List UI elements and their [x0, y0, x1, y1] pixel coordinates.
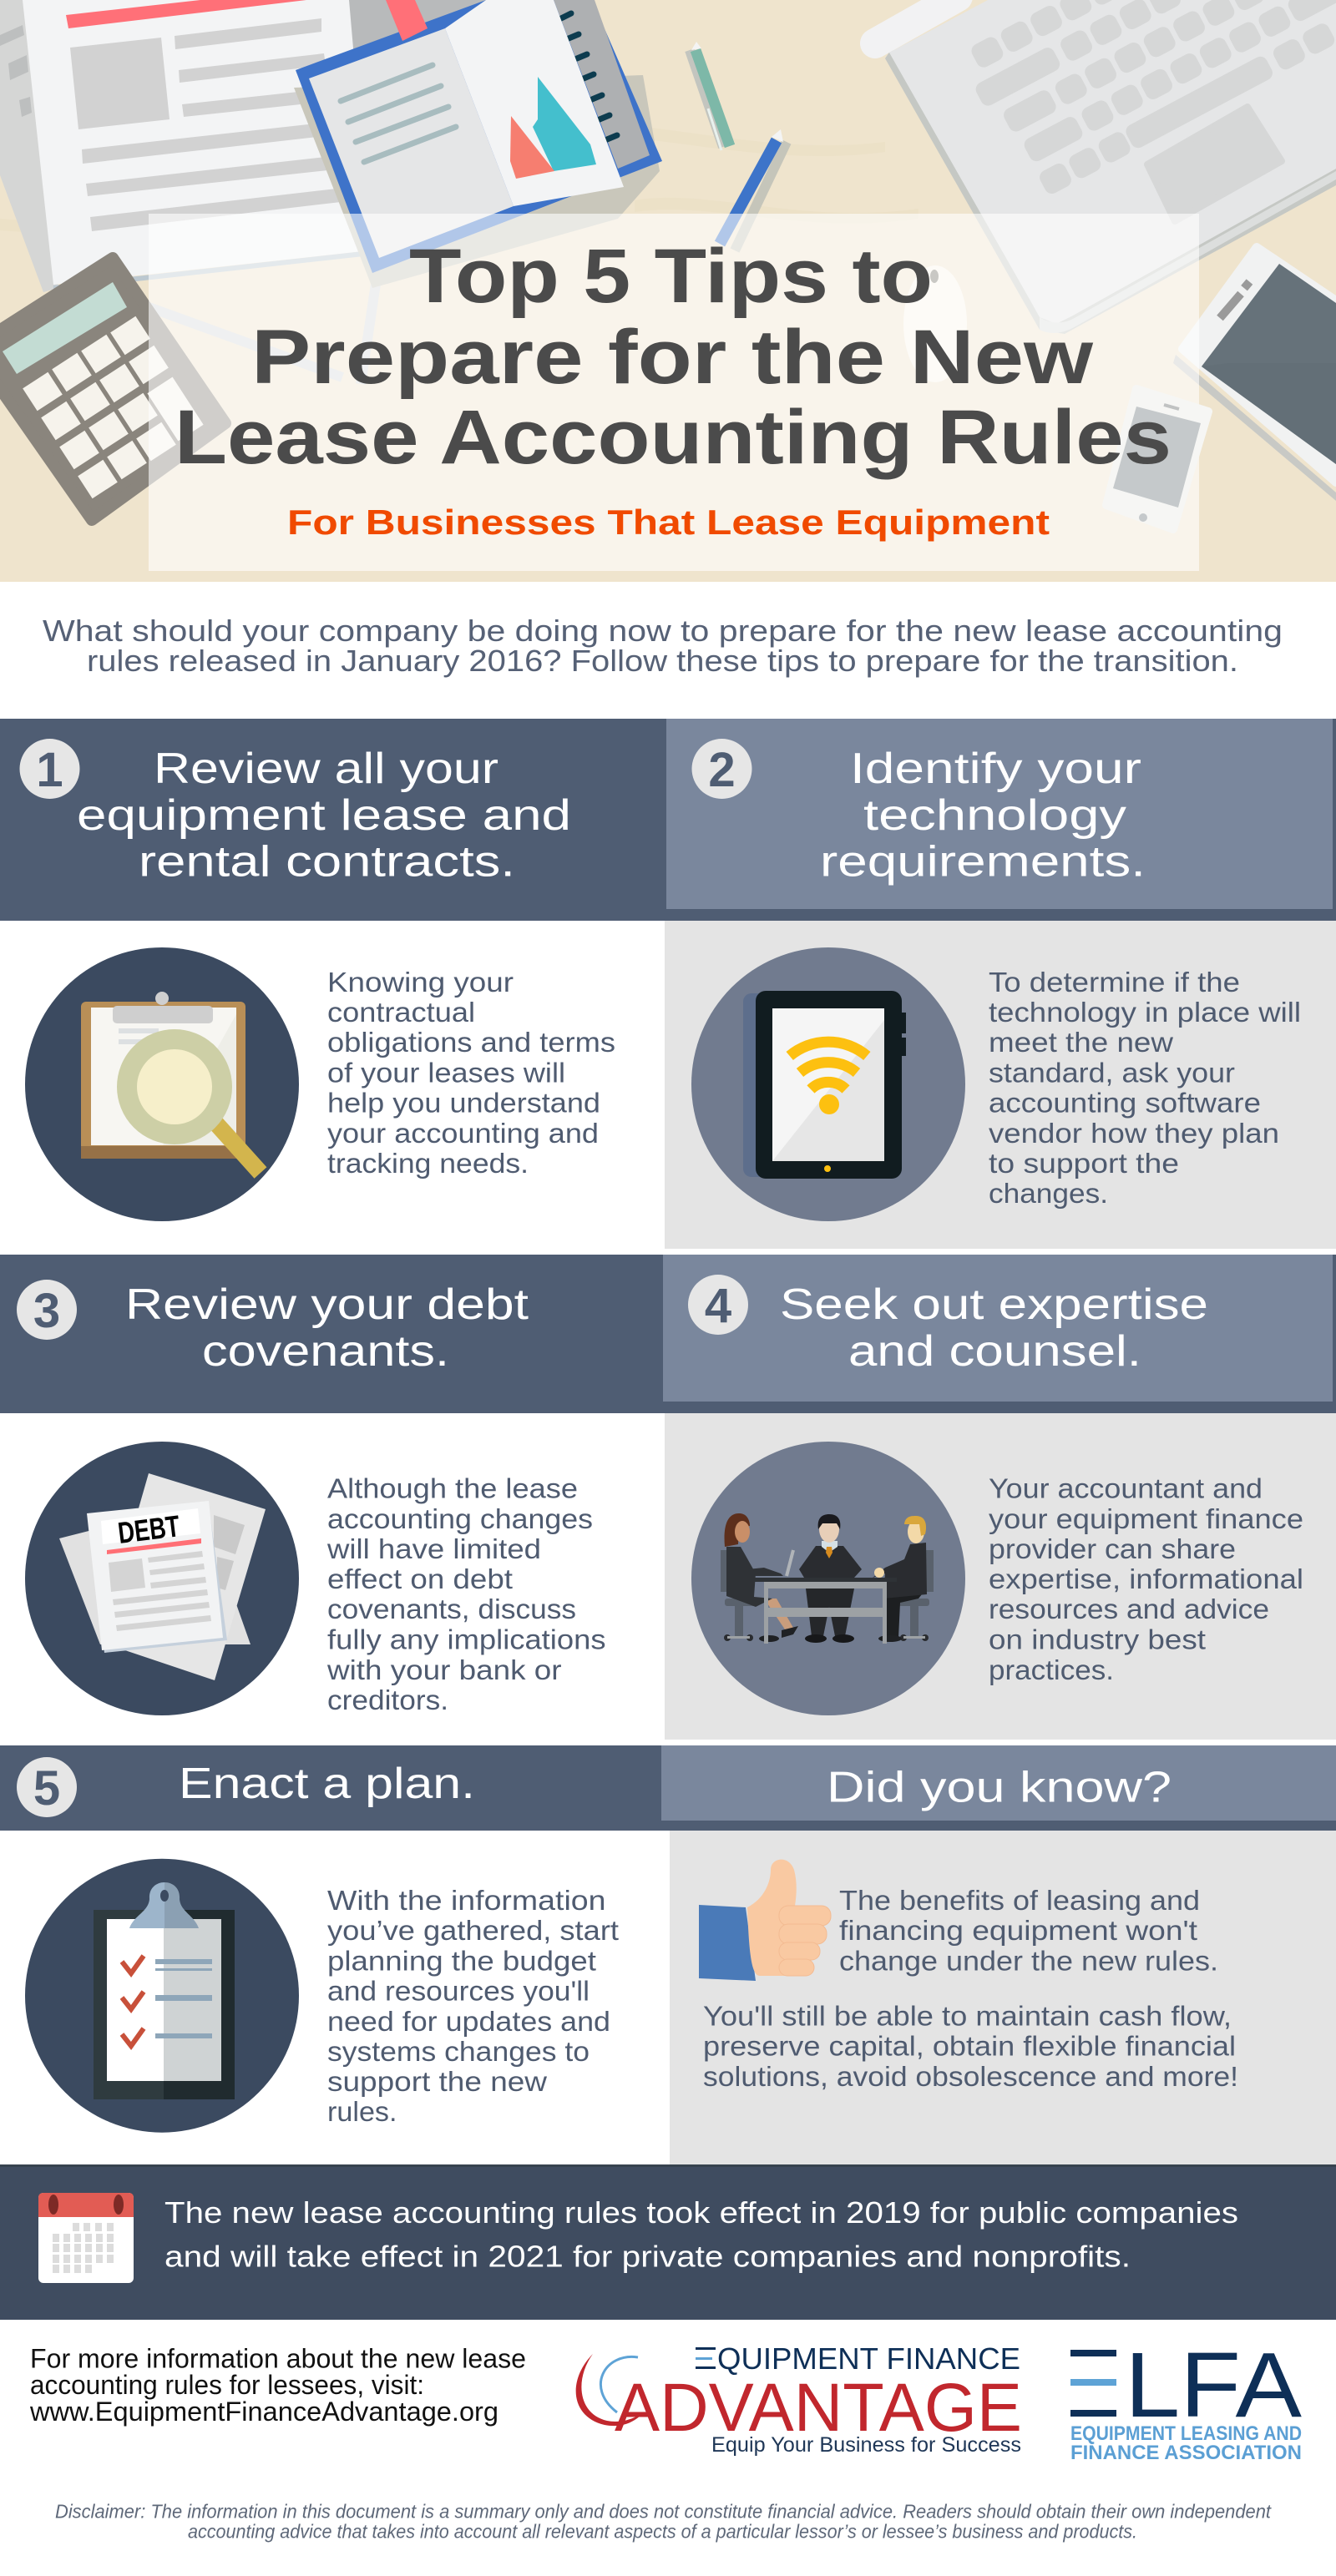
panel: tip 4 body: your equipment finance — [989, 1503, 1303, 1534]
panel: tip 5 header — [0, 1745, 661, 1831]
panel: tip 3 body: covenants, discuss — [327, 1594, 576, 1624]
title — [175, 234, 1172, 480]
intro text: What should your company be doing now to prepare for the new lease accounting — [43, 614, 1283, 648]
text: more information link — [29, 2344, 526, 2427]
title: Lease Accounting Rules — [175, 395, 1172, 480]
icon: pens — [690, 42, 787, 250]
icon: clipboard with magnifying glass — [25, 947, 299, 1221]
panel: tip 5 body: support the new — [327, 2066, 547, 2097]
panel: did you know header: Did you know? — [827, 1764, 1172, 1812]
panel: tip 1 header: 1 — [36, 743, 63, 797]
text: more information link: For more information about the new lease — [30, 2344, 526, 2374]
panel: tip 4 header: and counsel. — [848, 1327, 1141, 1376]
panel: tip 2 body — [665, 921, 1336, 1249]
panel: tip 1 header: Review all your — [154, 745, 498, 793]
panel: tip 3 body — [25, 1442, 606, 1715]
logo: Equipment Finance Advantage: ADVANTAGE — [615, 2370, 1022, 2446]
panel: did you know header — [661, 1745, 1336, 1831]
panel: tip 3 header — [0, 1255, 663, 1413]
icon: checklist clipboard — [25, 1859, 299, 2133]
panel: tip 3 body: will have limited — [326, 1533, 541, 1564]
panel: tip 3 header: 3 — [33, 1284, 60, 1338]
panel: tip 5 body: need for updates and — [327, 2006, 610, 2037]
icon: faint lamp shadows — [142, 284, 376, 384]
icon: stacked papers — [0, 0, 501, 292]
panel: tip 1 header: equipment lease and — [77, 791, 571, 840]
panel: tip 2 header: 2 — [708, 743, 736, 797]
icon: tablet with wifi — [691, 947, 965, 1221]
panel: tip 4 body: on industry best — [989, 1624, 1206, 1655]
panel: tip 2 body: technology in place will — [989, 997, 1301, 1028]
panel: tip 5 header: Enact a plan. — [179, 1760, 475, 1808]
icon: debt documents: DEBT — [116, 1508, 181, 1550]
panel: did you know body: The benefits of leasing and — [839, 1885, 1200, 1916]
panel: did you know body: You'll still be able to maintain cash flow, — [703, 2001, 1232, 2032]
logo: ELFA: FINANCE ASSOCIATION — [1070, 2442, 1302, 2464]
icon: calculator — [0, 258, 225, 520]
panel: tip 5 body: rules. — [327, 2096, 397, 2127]
logo: ELFA: EQUIPMENT LEASING AND — [1070, 2422, 1302, 2445]
logo: ELFA — [1070, 2334, 1303, 2464]
panel: tip 2 body: To determine if the — [989, 967, 1240, 998]
panel: tip 4 body — [665, 1413, 1336, 1740]
panel: tip 4 header: Seek out expertise — [780, 1280, 1208, 1329]
subtitle: For Businesses That Lease Equipment — [287, 503, 1050, 542]
panel: tip 5 body: you’ve gathered, start — [327, 1915, 619, 1946]
icon: calendar — [38, 2193, 134, 2283]
hero illustration: desk with papers, notebook, calculator, laptop and phones — [0, 0, 1336, 582]
panel: tip 1 body — [25, 947, 615, 1221]
panel: did you know body — [670, 1831, 1336, 2164]
text: more information link: accounting rules for lessees, visit: — [30, 2370, 424, 2400]
panel: tip 2 body: vendor how they plan — [989, 1118, 1279, 1149]
panel: tip 3 body: creditors. — [327, 1685, 448, 1715]
panel: translucent title backing — [149, 214, 1199, 571]
right man — [885, 1590, 925, 1638]
logo: Equipment Finance Advantage: Equip Your Business for Success — [711, 2433, 1021, 2457]
icon: open notebook with chart — [294, 0, 662, 288]
icon: debt documents — [25, 1442, 299, 1715]
panel: tip 3 body: Although the lease — [327, 1473, 578, 1504]
panel: tip 1 header: rental contracts. — [139, 838, 515, 886]
panel: tip 3 body: effect on debt — [327, 1563, 513, 1594]
panel: did you know body: preserve capital, obtain flexible financial — [703, 2031, 1236, 2062]
logo: Equipment Finance Advantage: QUIPMENT FINANCE — [717, 2341, 1020, 2376]
panel: tip 1 body: of your leases will — [327, 1057, 565, 1088]
logo: Equipment Finance Advantage — [576, 2341, 1022, 2457]
panel: tip 4 header — [663, 1255, 1336, 1413]
panel: tip 4 body: provider can share — [989, 1533, 1236, 1564]
panel: tip 5 body: systems changes to — [327, 2036, 590, 2067]
logo: ELFA: LFA — [1125, 2334, 1303, 2437]
woman — [764, 1599, 793, 1629]
intro text: rules released in January 2016? Follow these tips to prepare for the transition. — [87, 644, 1238, 678]
chairs — [721, 1550, 934, 1636]
table — [754, 1578, 897, 1582]
icon: laptop — [875, 0, 1336, 334]
panel: tip 1 body: help you understand — [327, 1088, 600, 1119]
disclaimer: accounting advice that takes into account all relevant aspects of a particular lessor’s or lessee’s business and products. — [188, 2521, 1137, 2543]
panel: tip 2 header — [666, 719, 1336, 921]
panel: tip 3 header: Review your debt — [125, 1280, 529, 1329]
panel: tip 5 body: and resources you'll — [327, 1975, 590, 2007]
panel: tip 3 header: covenants. — [202, 1327, 449, 1376]
panel: tip 2 body: meet the new — [989, 1027, 1173, 1058]
disclaimer — [55, 2501, 1273, 2543]
panel: tip 3 body: accounting changes — [327, 1503, 593, 1534]
panel: did you know body: financing equipment won't — [839, 1915, 1197, 1946]
panel: tip 4 body: expertise, informational — [989, 1563, 1303, 1594]
panel: did you know body: solutions, avoid obsolescence and more! — [703, 2061, 1238, 2092]
panel: tip 5 body — [25, 1859, 619, 2133]
icon: thumbs up — [699, 1860, 831, 1981]
panel: tip 1 body: obligations and terms — [327, 1027, 615, 1058]
panel: tip 2 header: technology — [863, 791, 1126, 840]
panel: tip 1 header — [0, 719, 666, 921]
panel: tip 2 body: accounting software — [989, 1088, 1261, 1119]
icon: mouse — [903, 265, 967, 382]
panel: tip 5 header: 5 — [33, 1761, 60, 1816]
panel: tip 2 body: standard, ask your — [989, 1057, 1235, 1088]
panel: tip 2 body: to support the — [989, 1148, 1179, 1179]
panel: tip 1 body: contractual — [327, 997, 475, 1028]
icon: smartphone — [1106, 389, 1208, 529]
panel: effective dates banner: The new lease accounting rules took effect in 2019 for public companies — [164, 2195, 1238, 2230]
panel: did you know body: change under the new rules. — [839, 1946, 1218, 1977]
text: more information link: www.EquipmentFinanceAdvantage.org — [29, 2397, 498, 2427]
icon: tablet device — [1173, 247, 1336, 501]
panel: tip 4 body: Your accountant and — [989, 1473, 1263, 1504]
panel: tip 2 body: changes. — [989, 1178, 1108, 1209]
panel: effective dates banner — [0, 2164, 1336, 2320]
panel: tip 1 body: your accounting and — [327, 1118, 599, 1149]
centre man — [806, 1589, 854, 1636]
panel: tip 5 body: With the information — [327, 1885, 606, 1916]
icon: business people at a table — [691, 1442, 965, 1715]
panel: tip 1 body: Knowing your — [327, 967, 514, 998]
panel: tip 4 body: practices. — [989, 1654, 1114, 1685]
intro text — [43, 614, 1283, 678]
panel: tip 2 header: requirements. — [820, 838, 1146, 886]
panel: tip 4 body: resources and advice — [989, 1594, 1269, 1624]
panel: tip 3 body: fully any implications — [327, 1624, 606, 1655]
panel: tip 1 body: tracking needs. — [327, 1148, 529, 1179]
title: Top 5 Tips to — [409, 234, 933, 319]
panel: tip 2 header: Identify your — [850, 745, 1141, 793]
panel: tip 4 header: 4 — [705, 1279, 731, 1333]
title: Prepare for the New — [251, 315, 1094, 400]
panel: tip 5 body: planning the budget — [327, 1945, 596, 1977]
panel: effective dates banner: and will take effect in 2021 for private companies and nonprofits. — [164, 2240, 1131, 2274]
disclaimer: Disclaimer: The information in this document is a summary only and does not constitute financial advice. Readers should obtain their own independent — [55, 2501, 1273, 2523]
panel: tip 3 body: with your bank or — [326, 1654, 562, 1685]
